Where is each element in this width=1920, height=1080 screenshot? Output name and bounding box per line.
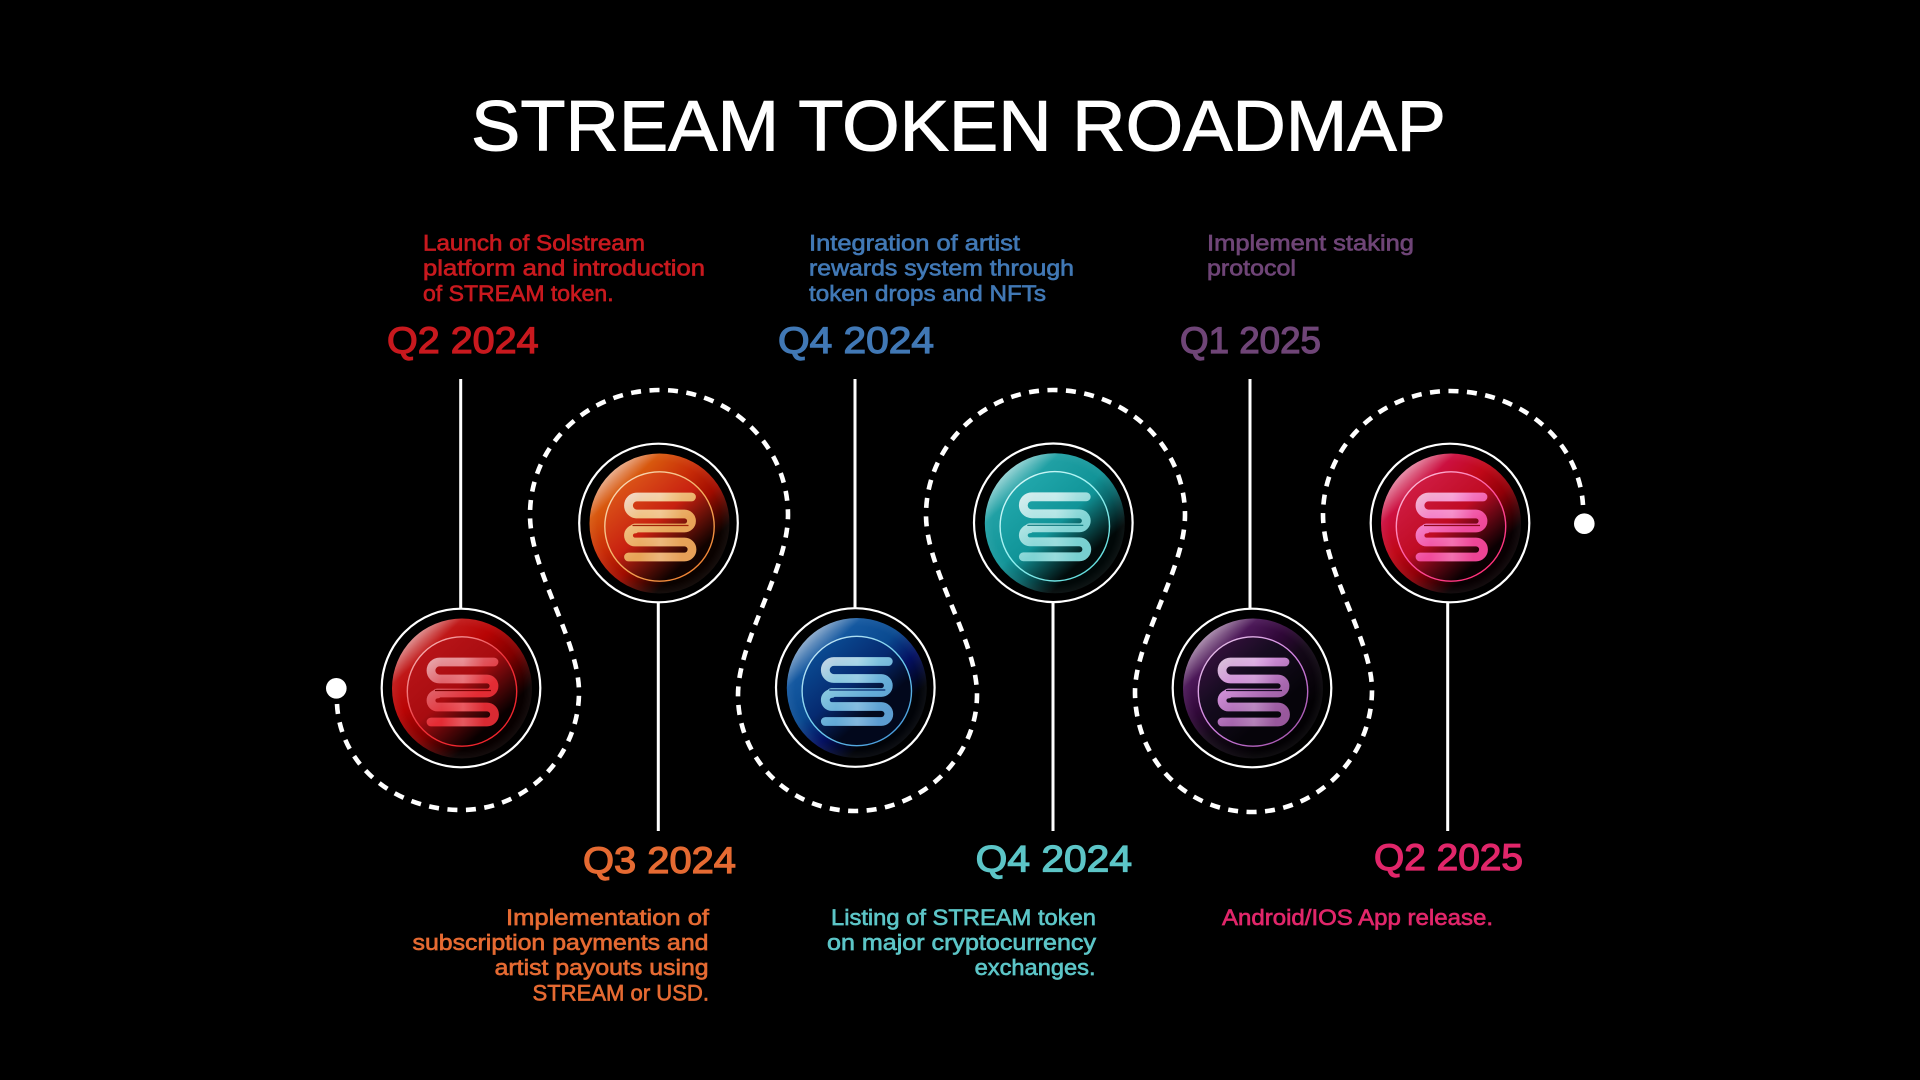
heading: Q4 2024 lower: Q4 2024 bbox=[976, 838, 1132, 880]
text: Q3 2024 description: Implementation of bbox=[506, 905, 710, 930]
dashed roadmap path bbox=[337, 390, 1583, 812]
heading: Q1 2025: Q1 2025 bbox=[1180, 319, 1321, 361]
text: Q3 2024 description: subscription payments and bbox=[412, 930, 708, 955]
text: Q4 2024 upper description: rewards system through bbox=[809, 256, 1074, 281]
connector line: Q3 2024 bbox=[657, 602, 660, 831]
text: Q3 2024 description: STREAM or USD. bbox=[532, 980, 709, 1006]
heading: Q3 2024: Q3 2024 bbox=[583, 839, 736, 881]
text: Q4 2024 upper description: Integration of artist bbox=[809, 231, 1020, 256]
text: Q2 2025 description: Android/IOS App release. bbox=[1222, 905, 1493, 930]
heading: Q2 2024: Q2 2024 bbox=[387, 319, 539, 361]
text: Q3 2024 description: artist payouts using bbox=[495, 955, 709, 980]
text: Q4 2024 upper description: token drops and NFTs bbox=[809, 281, 1046, 306]
icon: blue token Q4 2024 bbox=[776, 608, 935, 767]
connector line: Q2 2025 bbox=[1446, 602, 1449, 831]
text: Q2 2024 description bbox=[423, 231, 705, 306]
text: Q2 2024 description: of STREAM token. bbox=[423, 281, 614, 306]
title: STREAM TOKEN ROADMAP bbox=[471, 88, 1446, 166]
connector line: Q2 2024 bbox=[459, 379, 462, 609]
text: Q4 2024 upper description bbox=[809, 231, 1074, 306]
end dot bbox=[1574, 513, 1595, 534]
text: Q4 2024 lower description: on major cryptocurrency bbox=[827, 930, 1096, 955]
text: Q4 2024 lower description: Listing of STREAM token bbox=[831, 905, 1096, 930]
text: Q4 2024 lower description: exchanges. bbox=[975, 955, 1096, 980]
connector line: Q4 2024 lower bbox=[1052, 602, 1054, 831]
text: Q2 2024 description: Launch of Solstream bbox=[423, 231, 645, 256]
icon: pink token Q2 2025 bbox=[1371, 444, 1529, 602]
heading: Q4 2024 upper: Q4 2024 bbox=[778, 319, 934, 361]
text: Q1 2025 description bbox=[1207, 231, 1414, 281]
text: Q4 2024 lower description bbox=[827, 905, 1096, 980]
heading: Q2 2025: Q2 2025 bbox=[1374, 836, 1523, 878]
icon: orange token Q3 2024 bbox=[579, 444, 738, 602]
icon: purple token Q1 2025 bbox=[1173, 609, 1331, 767]
connector line: Q1 2025 bbox=[1248, 379, 1252, 609]
text: Q2 2024 description: platform and introduction bbox=[423, 256, 705, 281]
connector line: Q4 2024 upper bbox=[854, 379, 856, 609]
text: Q1 2025 description: Implement staking bbox=[1207, 231, 1414, 256]
text: Q1 2025 description: protocol bbox=[1207, 256, 1296, 281]
start dot bbox=[326, 678, 347, 699]
icon: red token Q2 2024 bbox=[382, 609, 540, 767]
icon: teal token Q4 2024 bbox=[974, 444, 1133, 602]
text: Q3 2024 description bbox=[412, 905, 710, 1006]
